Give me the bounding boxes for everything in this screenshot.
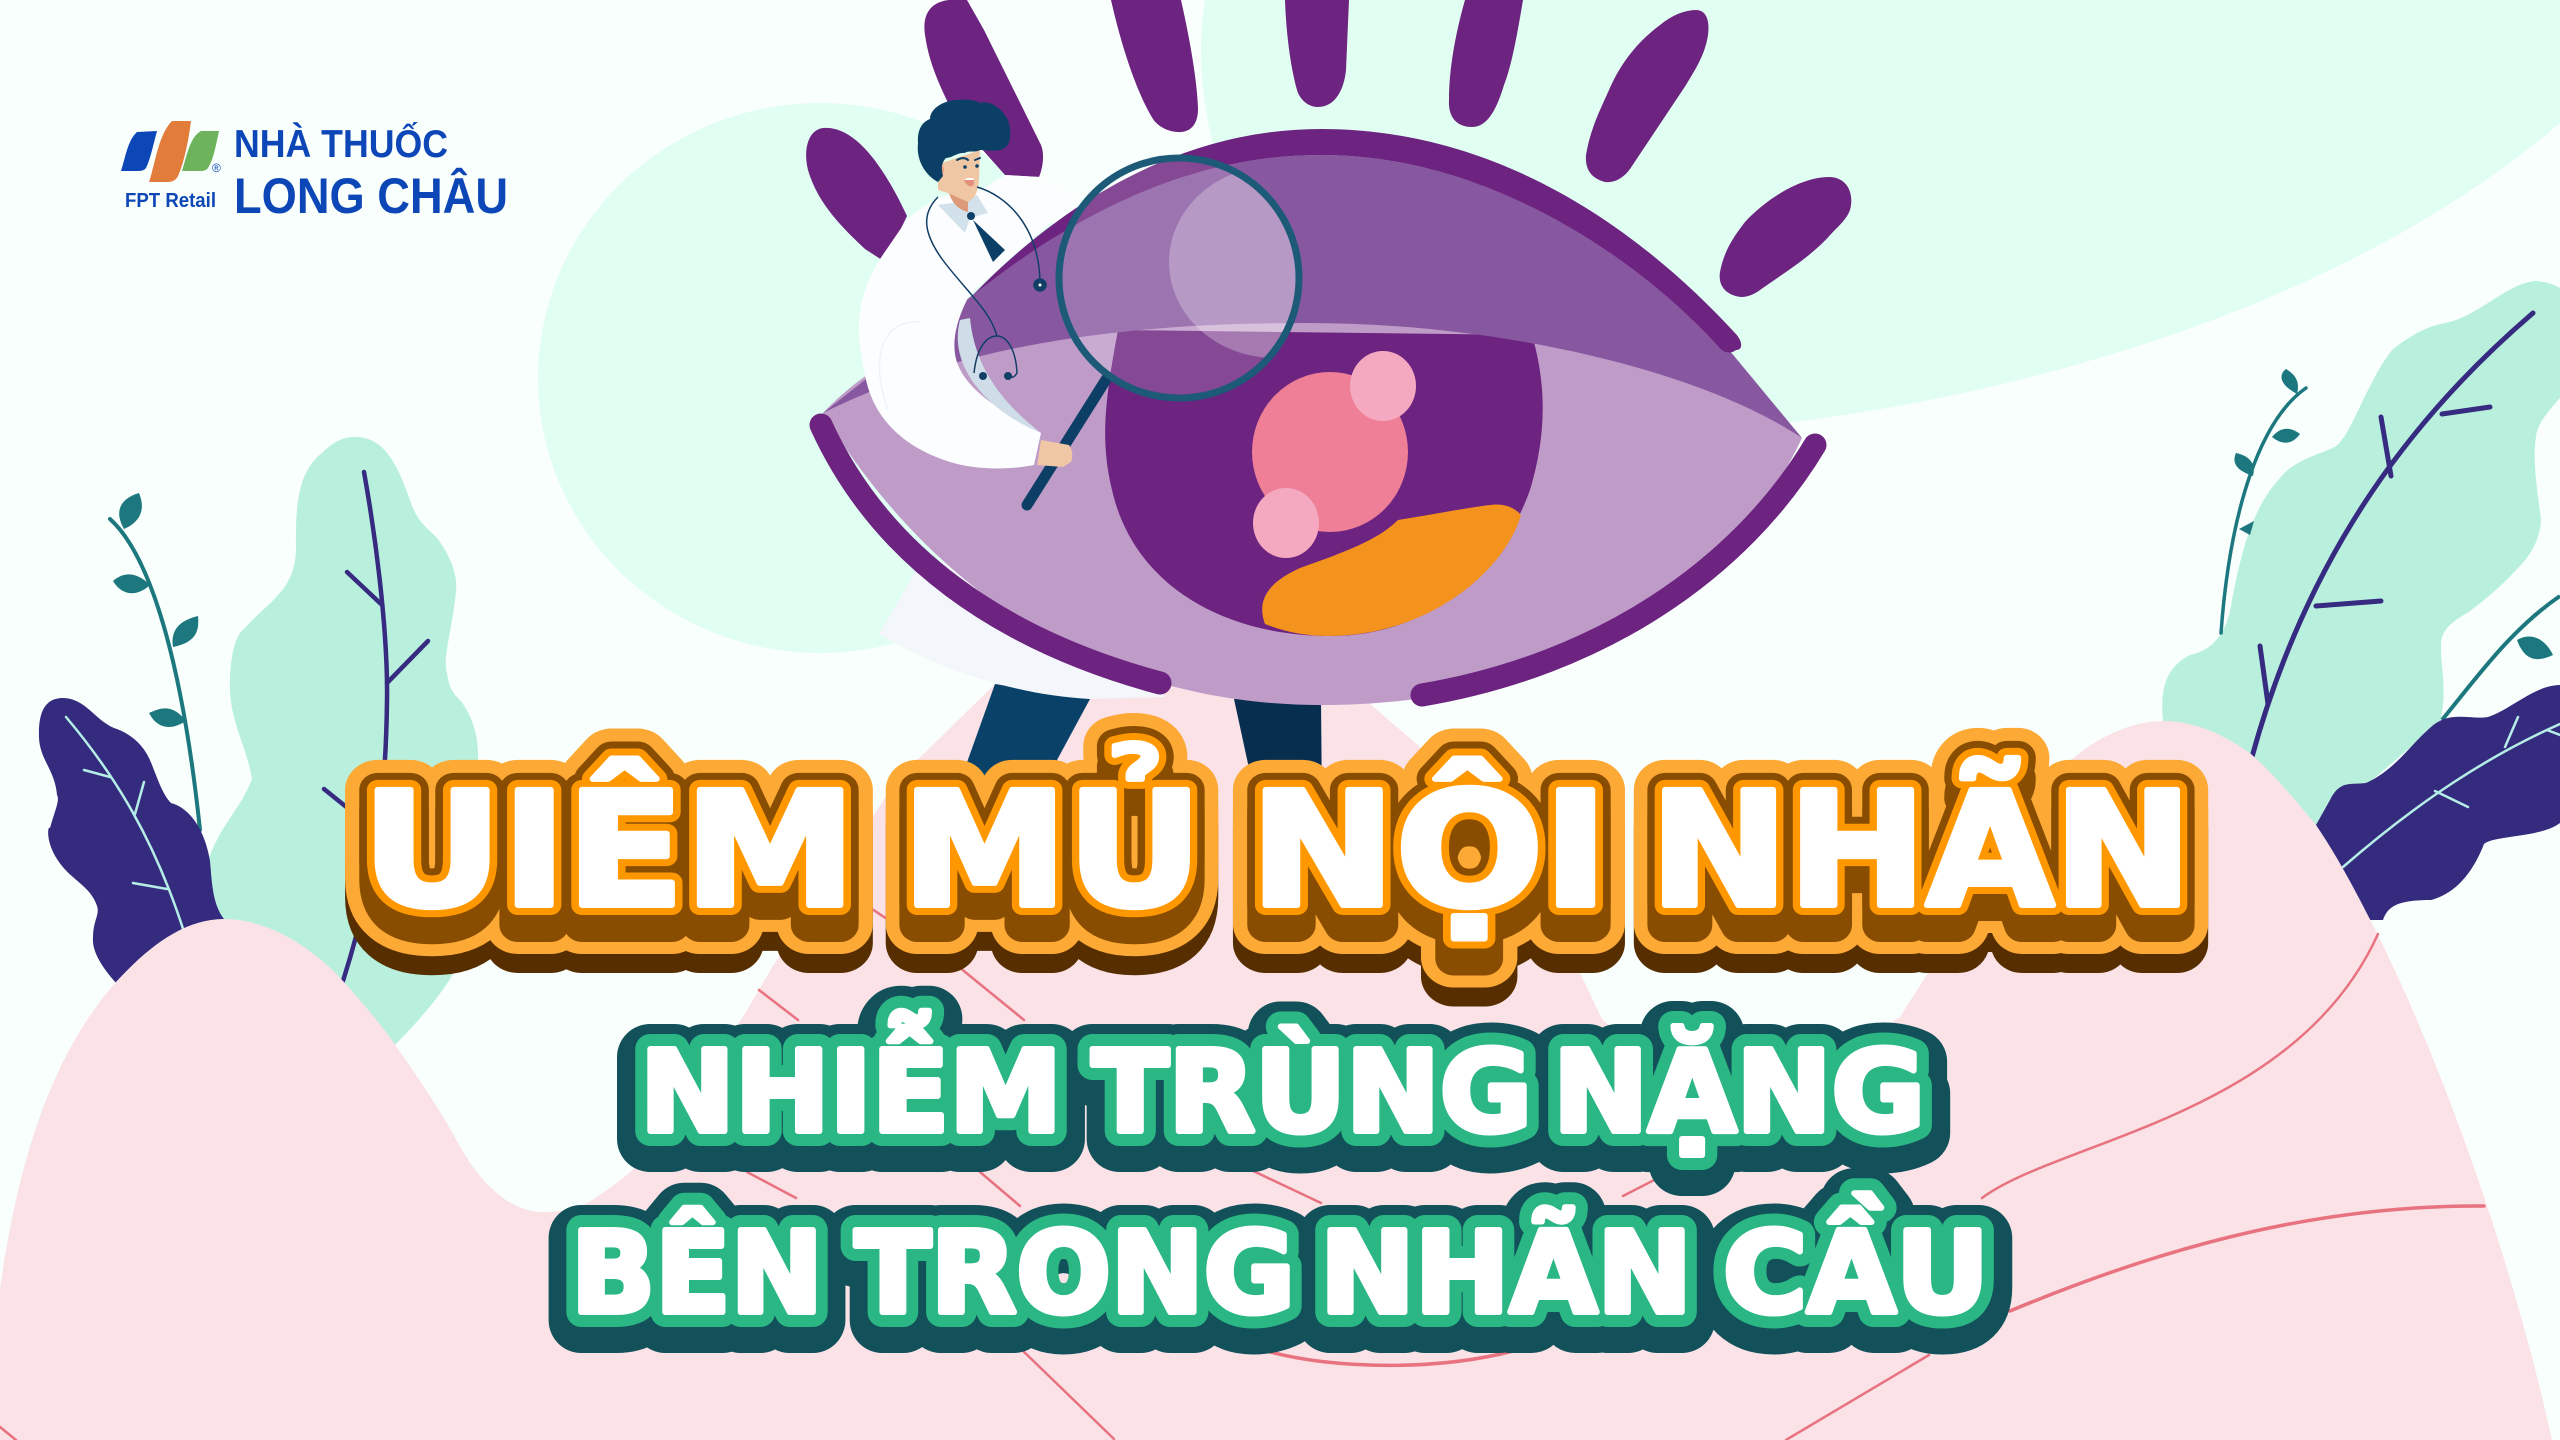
doctor lower coat bbox=[879, 560, 1165, 699]
right leg bbox=[1234, 699, 1322, 810]
face features bbox=[957, 158, 980, 186]
subtitle line 1: NHIỄM TRÙNG NẶNG: NHIỄM bbox=[640, 1010, 1062, 1158]
lower lid right outline bbox=[1422, 445, 1815, 695]
plant: left group bbox=[39, 437, 478, 1046]
subtitle line 2: BÊN TRONG NHÃN CẦU: BÊN bbox=[571, 1215, 823, 1347]
title: UIÊM MỦ NỘI NHÃN bbox=[362, 742, 2192, 981]
title: UIÊM MỦ NỘI NHÃN: NHÃN bbox=[1650, 776, 2192, 962]
left mint leaf vein bbox=[324, 472, 428, 981]
title: UIÊM MỦ NỘI NHÃN: NHÃN bbox=[1650, 757, 2192, 943]
ear bbox=[932, 164, 944, 176]
title: UIÊM MỦ NỘI NHÃN: NHÃN bbox=[1650, 795, 2192, 981]
stethoscope bbox=[927, 187, 1046, 380]
logo FPT mark bbox=[121, 121, 219, 182]
subtitle line 1: NHIỄM TRÙNG NẶNG: NHIỄM bbox=[640, 1010, 1062, 1158]
doctor upper body bbox=[859, 100, 1107, 505]
title: UIÊM MỦ NỘI NHÃN: UIÊM bbox=[362, 777, 856, 963]
title: UIÊM MỦ NỘI NHÃN: UIÊM bbox=[362, 776, 856, 962]
logo LONG CHÂU: LONG CHÂU bbox=[234, 168, 508, 224]
hand bbox=[1037, 440, 1072, 467]
title: UIÊM MỦ NỘI NHÃN: NỘI bbox=[1250, 758, 1608, 943]
title: UIÊM MỦ NỘI NHÃN: UIÊM bbox=[362, 757, 856, 943]
left leg bbox=[950, 684, 1090, 810]
magnifier handle bbox=[1027, 378, 1107, 505]
logo bbox=[121, 121, 508, 224]
eyelash 1 bbox=[806, 128, 907, 262]
tie bbox=[967, 212, 1005, 262]
eyelash 4 bbox=[1285, 0, 1349, 107]
subtitle line 2: BÊN TRONG NHÃN CẦU: CẦU bbox=[1723, 1193, 1989, 1339]
title: UIÊM MỦ NỘI NHÃN: NHÃN bbox=[1650, 757, 2192, 943]
title: UIÊM MỦ NỘI NHÃN: NHÃN bbox=[1650, 757, 2192, 943]
logo NHÀ THUỐC: NHÀ THUỐC bbox=[234, 121, 448, 166]
subtitle line 1: NHIỄM TRÙNG NẶNG: NẶNG bbox=[1553, 1026, 1925, 1158]
title: UIÊM MỦ NỘI NHÃN: UIÊM bbox=[362, 795, 856, 981]
mint blob top right bbox=[1201, 0, 2560, 422]
title: UIÊM MỦ NỘI NHÃN: UIÊM bbox=[362, 757, 856, 943]
lower lid left outline bbox=[821, 425, 1160, 683]
title: UIÊM MỦ NỘI NHÃN: MỦ bbox=[902, 762, 1202, 963]
eyelash 3 bbox=[1111, 0, 1198, 132]
coat bbox=[859, 175, 1080, 468]
right big mint leaf bbox=[2162, 281, 2560, 828]
lens tint bbox=[1059, 158, 1299, 398]
title: UIÊM MỦ NỘI NHÃN: MỦ bbox=[902, 761, 1202, 962]
pink hill contour lines bbox=[0, 907, 2484, 1440]
logo FPT Retail: FPT Retail bbox=[125, 190, 216, 212]
left teal sprig bbox=[110, 493, 200, 830]
title: UIÊM MỦ NỘI NHÃN: NHÃN bbox=[1650, 757, 2192, 943]
subtitle line 1: NHIỄM TRÙNG NẶNG bbox=[640, 1010, 1925, 1166]
subtitle line 2: BÊN TRONG NHÃN CẦU: CẦU bbox=[1723, 1201, 1989, 1347]
eye bbox=[821, 129, 1815, 705]
left dark leaf veins bbox=[66, 717, 185, 935]
title: UIÊM MỦ NỘI NHÃN: MỦ bbox=[902, 742, 1202, 943]
subtitle line 1: NHIỄM TRÙNG NẶNG: NẶNG bbox=[1553, 1034, 1925, 1166]
doctor legs bbox=[950, 684, 1322, 810]
light pink spot top bbox=[1350, 351, 1416, 421]
subtitle line 2: BÊN TRONG NHÃN CẦU: BÊN bbox=[571, 1207, 823, 1339]
eyelash 7 bbox=[1720, 177, 1851, 297]
pink pupil bbox=[1252, 372, 1408, 532]
subtitle line 1: NHIỄM TRÙNG NẶNG: TRÙNG bbox=[1092, 1035, 1532, 1166]
sleeve shadow bbox=[958, 318, 1041, 433]
eyelashes bbox=[806, 0, 1851, 297]
subtitle line 1: NHIỄM TRÙNG NẶNG: TRÙNG bbox=[1092, 1027, 1532, 1158]
subtitle line 1: NHIỄM TRÙNG NẶNG: NHIỄM bbox=[640, 1018, 1062, 1166]
lens ring bbox=[1059, 158, 1299, 398]
subtitle line 1: NHIỄM TRÙNG NẶNG: TRÙNG bbox=[1092, 1027, 1532, 1158]
collar bbox=[938, 195, 988, 233]
pink hills bbox=[0, 590, 2552, 1440]
subtitle line 2: BÊN TRONG NHÃN CẦU: NHÃN bbox=[1320, 1215, 1692, 1347]
right dark leaf veins bbox=[2343, 717, 2560, 867]
eyelash 5 bbox=[1449, 0, 1523, 127]
magnifying glass bbox=[1056, 154, 1302, 402]
eyelash 2 bbox=[924, 0, 1043, 177]
subtitle line 2: BÊN TRONG NHÃN CẦU bbox=[571, 1193, 1989, 1347]
face bbox=[938, 150, 980, 202]
title: UIÊM MỦ NỘI NHÃN: MỦ bbox=[902, 742, 1202, 943]
right dark leaf bbox=[2316, 685, 2560, 920]
subtitle line 2: BÊN TRONG NHÃN CẦU: NHÃN bbox=[1320, 1207, 1692, 1339]
title: UIÊM MỦ NỘI NHÃN: NỘI bbox=[1250, 758, 1608, 943]
left big mint leaf bbox=[204, 437, 478, 1046]
neck bbox=[948, 190, 968, 212]
title: UIÊM MỦ NỘI NHÃN: NHÃN bbox=[1650, 777, 2192, 963]
subtitle line 2: BÊN TRONG NHÃN CẦU: TRONG bbox=[855, 1209, 1295, 1339]
right lower teal sprig bbox=[2442, 596, 2560, 720]
right teal sprig bbox=[2221, 369, 2306, 633]
logo registered mark: ® bbox=[212, 161, 221, 175]
upper eyelid bbox=[823, 155, 1802, 438]
subtitle line 2: BÊN TRONG NHÃN CẦU: TRONG bbox=[855, 1209, 1295, 1339]
right mint leaf vein bbox=[2252, 313, 2533, 757]
subtitle line 2: BÊN TRONG NHÃN CẦU: TRONG bbox=[855, 1217, 1295, 1347]
orange pus bbox=[1262, 505, 1521, 636]
coat fold bbox=[879, 322, 920, 410]
title: UIÊM MỦ NỘI NHÃN: NỘI bbox=[1250, 777, 1608, 962]
subtitle line 2: BÊN TRONG NHÃN CẦU: BÊN bbox=[571, 1207, 823, 1339]
title: UIÊM MỦ NỘI NHÃN: NỘI bbox=[1250, 758, 1608, 943]
eyelash 6 bbox=[1586, 10, 1708, 182]
mint circle left bbox=[538, 103, 1102, 653]
iris bbox=[1105, 330, 1543, 636]
title: UIÊM MỦ NỘI NHÃN: NỘI bbox=[1250, 796, 1608, 981]
upper lid outline bbox=[972, 129, 1741, 353]
title: UIÊM MỦ NỘI NHÃN: UIÊM bbox=[362, 757, 856, 943]
subtitle line 1: NHIỄM TRÙNG NẶNG: NẶNG bbox=[1553, 1026, 1925, 1158]
title: UIÊM MỦ NỘI NHÃN: NỘI bbox=[1250, 778, 1608, 963]
hair bbox=[918, 100, 1010, 182]
subtitle line 2: BÊN TRONG NHÃN CẦU: NHÃN bbox=[1320, 1207, 1692, 1339]
plant: right group bbox=[2162, 281, 2560, 920]
eye white bbox=[823, 300, 1802, 705]
title: UIÊM MỦ NỘI NHÃN: NỘI bbox=[1250, 758, 1608, 943]
title: UIÊM MỦ NỘI NHÃN: MỦ bbox=[902, 780, 1202, 981]
title: UIÊM MỦ NỘI NHÃN: MỦ bbox=[902, 742, 1202, 943]
left dark leaf bbox=[39, 698, 224, 1000]
subtitle line 2: BÊN TRONG NHÃN CẦU: CẦU bbox=[1723, 1193, 1989, 1339]
title: UIÊM MỦ NỘI NHÃN: MỦ bbox=[902, 742, 1202, 943]
title: UIÊM MỦ NỘI NHÃN: UIÊM bbox=[362, 757, 856, 943]
light pink spot bottom bbox=[1253, 488, 1319, 558]
lens highlight bbox=[1169, 174, 1296, 358]
